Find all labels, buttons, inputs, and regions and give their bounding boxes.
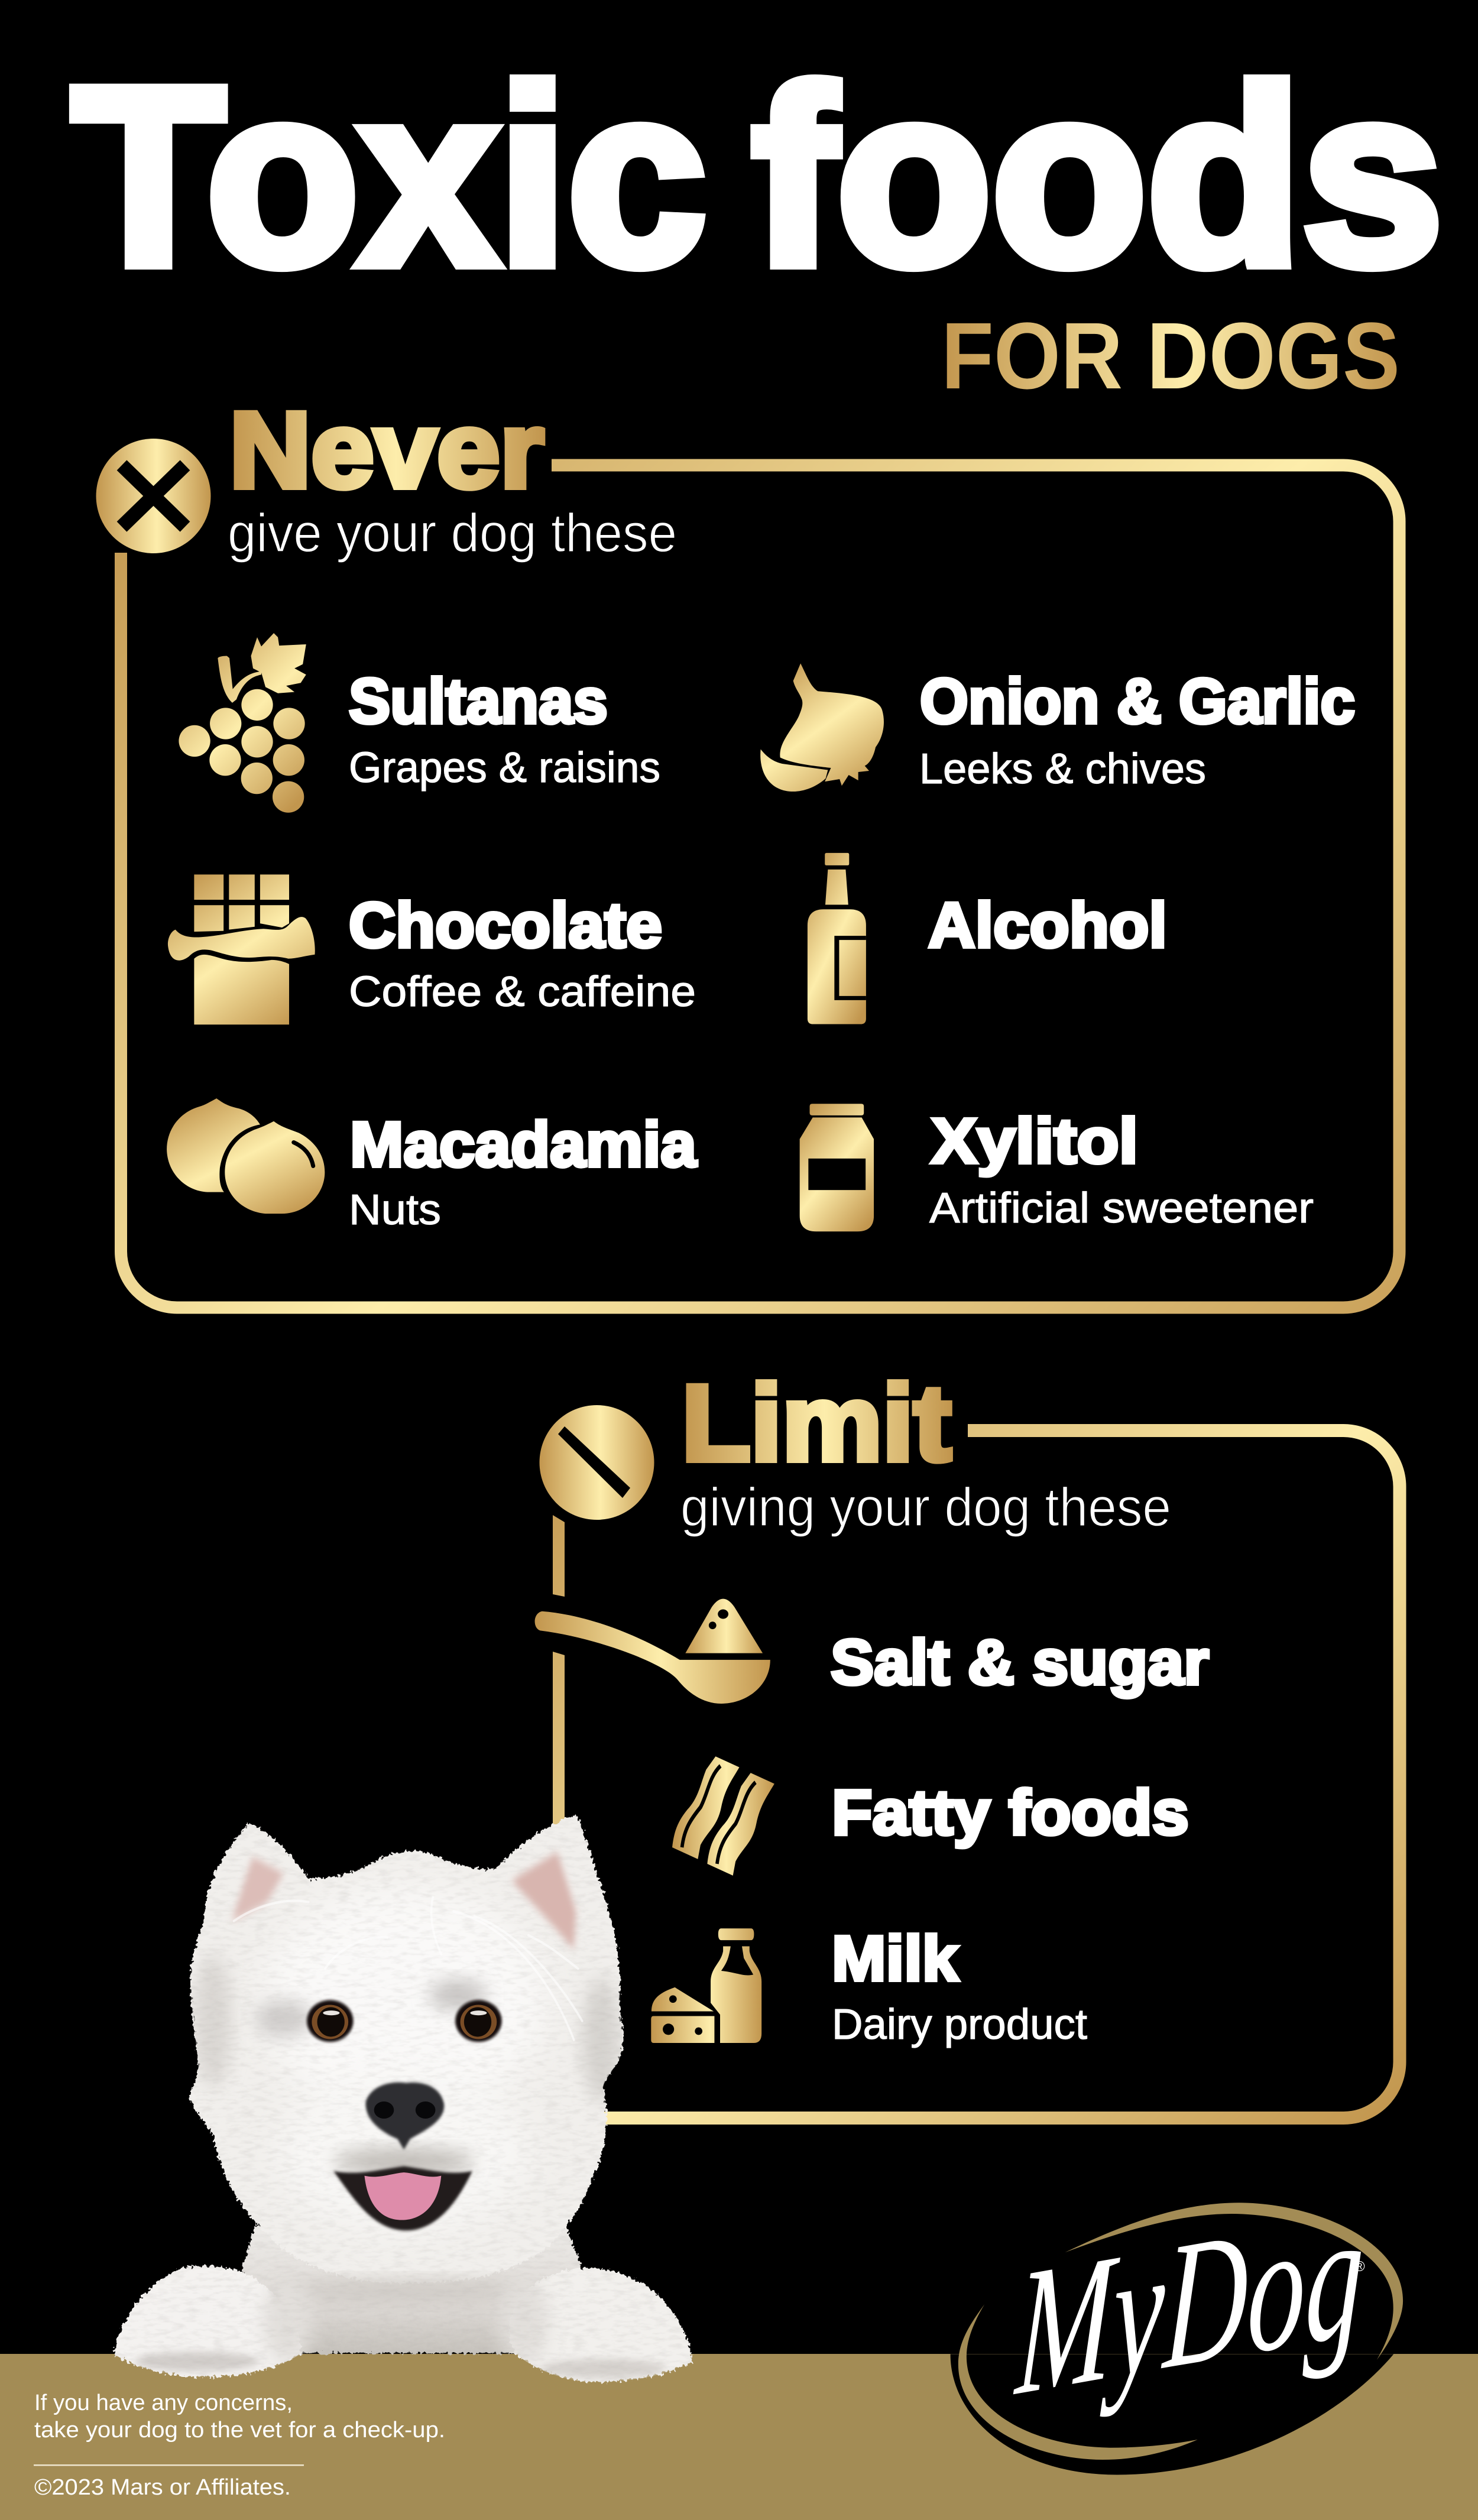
icon: milk and cheese [651,1928,761,2043]
icon: bottle [808,853,866,1024]
item: sultanas [179,633,660,813]
item: onion and garlic [760,663,1355,793]
heading: limit: Limit [682,1363,951,1483]
frame: never panel [121,465,1399,1308]
left ear inner [232,1857,284,1921]
icon: bacon [672,1756,774,1876]
sublabel: coffee and caffeine: Coffee & caffeine [349,968,696,1016]
icon: no-entry badge [539,1405,654,1520]
item: xylitol [800,1104,1314,1232]
label: sultanas: Sultanas [349,665,608,737]
item: alcohol [808,853,1167,1024]
item: salt and sugar [535,1599,1209,1704]
title: foods [752,35,1443,317]
tongue [364,2172,441,2220]
title [72,35,1443,317]
item: fatty foods [672,1756,1189,1876]
subheading: limit: giving your dog these [680,1477,1171,1538]
logo black oval [951,2354,1393,2474]
sublabel: leeks and chives: Leeks & chives [919,745,1206,793]
subheading: never: give your dog these [228,503,677,563]
footer band [0,2354,1478,2520]
label: salt and sugar: Salt & sugar [831,1626,1209,1698]
label: alcohol: Alcohol [928,889,1167,961]
subtitle: for dogs: FOR DOGS [941,303,1400,408]
right ear inner [512,1852,576,1950]
sublabel: grapes and raisins: Grapes & raisins [349,744,660,792]
fur silhouette [114,1815,692,2382]
dog illustration [105,1802,702,2392]
label: xylitol: Xylitol [931,1105,1138,1176]
panel: limit [535,1363,1400,2118]
logo registered mark: ® [1354,2259,1365,2275]
item: milk [651,1922,1087,2048]
title: Toxic [72,35,706,317]
icon: macadamia nuts [167,1098,325,1214]
sublabel: dairy product: Dairy product [832,2001,1087,2048]
sublabel: nuts: Nuts [349,1186,441,1234]
mouth [333,2167,472,2230]
icon: chocolate bar [168,874,315,1024]
frame: limit left bar [553,1515,565,1833]
label: onion and garlic: Onion & Garlic [920,665,1355,737]
nose [366,2083,444,2149]
label: chocolate: Chocolate [349,889,662,961]
note line 2: take your dog to the vet for a check-up. [34,2418,445,2443]
logo: my dog [951,2172,1403,2474]
label: fatty foods: Fatty foods [832,1776,1189,1848]
heading: never: Never [229,390,544,510]
item: chocolate [168,874,696,1024]
icon: spoon with salt [535,1599,770,1704]
icon: grapes [179,633,306,813]
label: milk: Milk [832,1922,959,1994]
icon: cross badge [96,439,210,553]
fur shading [105,1802,702,2392]
left eye [307,2000,354,2042]
item: macadamia [167,1098,697,1234]
logo gold swooshes [958,2203,1403,2460]
icon: garlic [760,663,884,792]
note line 1: If you have any concerns, [34,2391,293,2415]
copyright: ©2023 Mars or Affiliates. [34,2475,291,2500]
frame: limit panel [591,1431,1400,2118]
sublabel: artificial sweetener: Artificial sweetener [929,1185,1314,1232]
label: macadamia: Macadamia [350,1108,697,1180]
footer note [34,2391,445,2500]
fur strands [234,1897,582,2040]
panel: never [96,390,1399,1308]
right eye [455,2000,502,2042]
icon: jar [800,1104,874,1231]
